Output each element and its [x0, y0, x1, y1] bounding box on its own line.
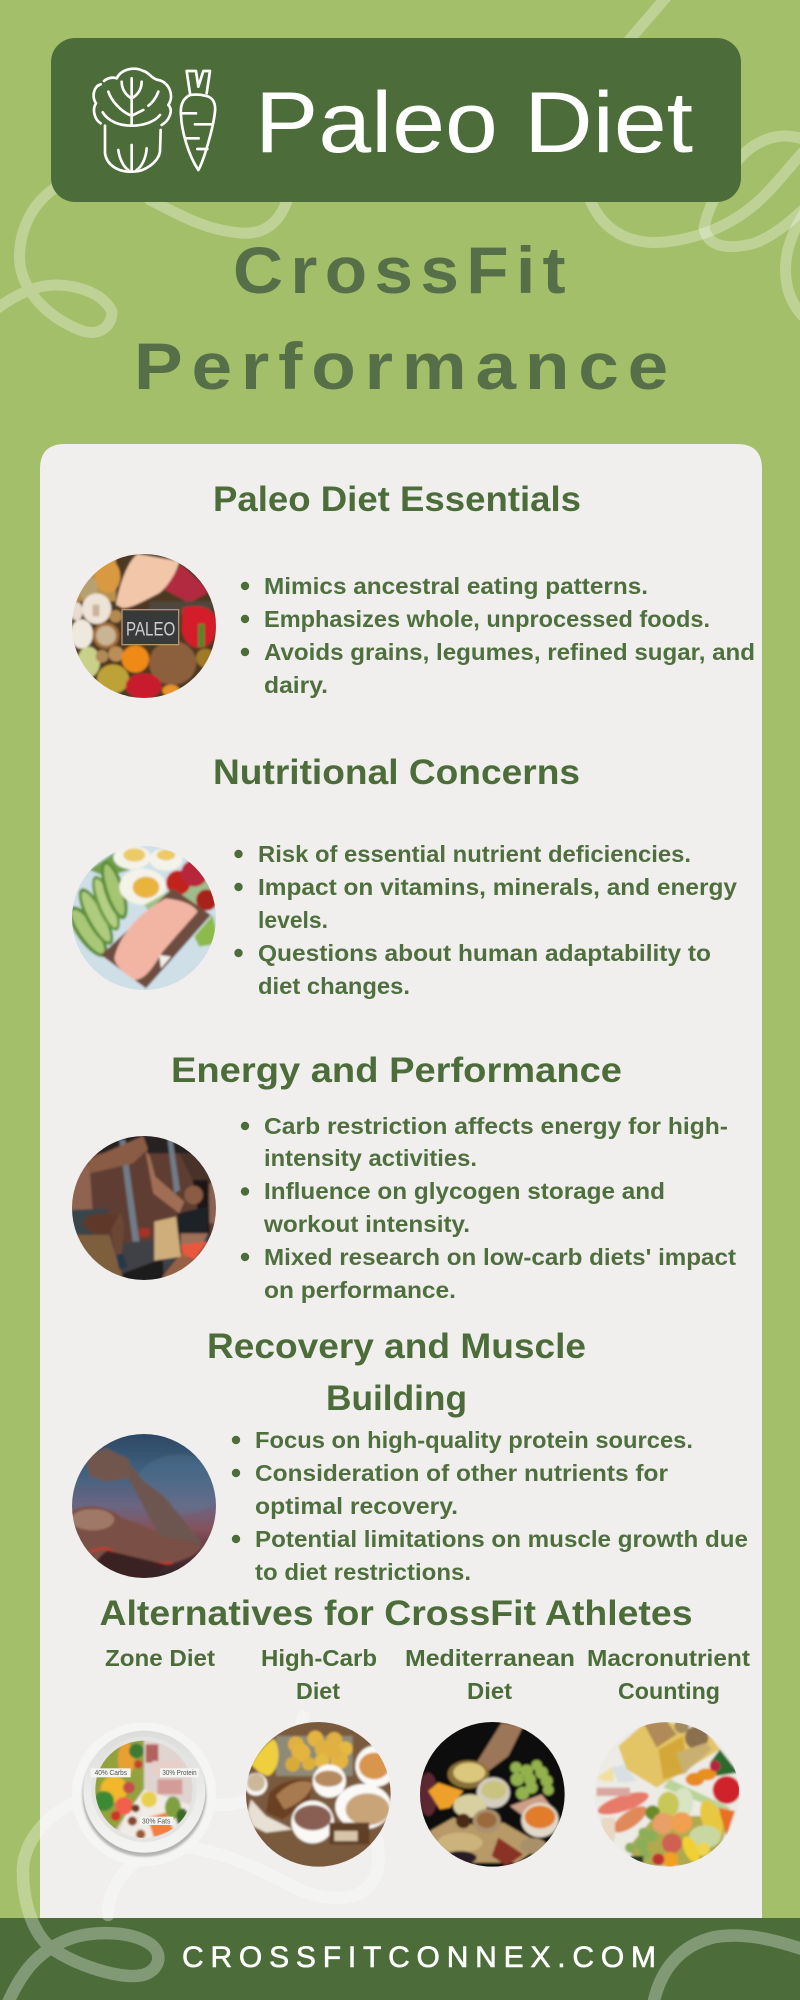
- title: Paleo Diet: Paleo Diet: [255, 75, 693, 171]
- photo: eggs, avocado and salmon: [72, 846, 216, 990]
- bullet list: Carb restriction affects energy for high-: [264, 1113, 728, 1139]
- column: Mediterranean Diet: Diet: [467, 1678, 512, 1704]
- bullet list: [234, 841, 737, 999]
- panel: content card: [40, 444, 762, 1918]
- bullet list: on performance.: [264, 1277, 456, 1303]
- subtitle: CrossFit Performance: CrossFit: [233, 233, 573, 307]
- bullet list: to diet restrictions.: [255, 1559, 471, 1585]
- bullet list: Potential limitations on muscle growth due: [255, 1526, 748, 1552]
- heading: Nutritional Concerns: [213, 753, 580, 792]
- bullet list: Focus on high-quality protein sources.: [255, 1427, 693, 1453]
- column: High-Carb Diet: High-Carb: [261, 1645, 377, 1671]
- photo: paleo foods: [72, 554, 216, 698]
- bullet list: [241, 1113, 736, 1303]
- photo label: PALEO: PALEO: [126, 620, 175, 641]
- column: Mediterranean Diet: Mediterranean: [405, 1645, 575, 1671]
- bullet list: Emphasizes whole, unprocessed foods.: [264, 606, 710, 632]
- bullet list: Consideration of other nutrients for: [255, 1460, 668, 1486]
- bullet list: [232, 1427, 748, 1585]
- column: Zone Diet: [81, 1649, 215, 1858]
- bullet list: dairy.: [264, 672, 328, 698]
- plate labels: [95, 1770, 197, 1825]
- plate labels: 30% Fats: [142, 1818, 171, 1825]
- column: Zone Diet: Zone Diet: [105, 1645, 215, 1671]
- heading: Recovery and Muscle: [207, 1327, 586, 1366]
- section: Energy and Performance: [66, 1051, 736, 1303]
- photo: mediterranean platter: [417, 1719, 570, 1869]
- subtitle: CrossFit Performance: [134, 233, 677, 403]
- bullet list: Mimics ancestral eating patterns.: [264, 573, 648, 599]
- bullet list: diet changes.: [258, 973, 410, 999]
- bullet list: optimal recovery.: [255, 1493, 458, 1519]
- bullet list: [241, 573, 755, 698]
- bullet list: Questions about human adaptability to: [258, 940, 711, 966]
- subtitle: CrossFit Performance: Performance: [134, 329, 677, 403]
- heading: Paleo Diet Essentials: [213, 480, 581, 519]
- plate labels: 40% Carbs: [95, 1770, 127, 1777]
- heading: Building: [326, 1379, 467, 1418]
- plate labels: 30% Protein: [162, 1770, 197, 1777]
- photo: zone diet plate: [81, 1730, 208, 1858]
- bullet list: Mixed research on low-carb diets' impact: [264, 1244, 736, 1270]
- column: High-Carb Diet: Diet: [296, 1678, 340, 1704]
- bullet list: levels.: [258, 907, 328, 933]
- footer bar: [0, 1918, 800, 2000]
- heading: [207, 1327, 586, 1418]
- section: Alternatives for CrossFit Athletes: [72, 1594, 750, 1869]
- photo: athletes high five: [72, 1136, 216, 1280]
- bullet list: workout intensity.: [263, 1211, 470, 1237]
- column: Macronutrient Counting: Macronutrient: [587, 1645, 750, 1671]
- photo: macronutrient food groups: [592, 1719, 742, 1869]
- photo: high-carb foods: [243, 1719, 397, 1869]
- bullet list: Risk of essential nutrient deficiencies.: [258, 841, 691, 867]
- section: Nutritional Concerns: [62, 753, 737, 999]
- icon: lettuce and carrot: [94, 69, 215, 172]
- photo: flexed arm: [72, 1434, 216, 1578]
- column: High-Carb Diet: [243, 1645, 397, 1869]
- header banner: [51, 38, 741, 202]
- heading: Alternatives for CrossFit Athletes: [100, 1594, 692, 1633]
- bullet list: Avoids grains, legumes, refined sugar, and: [264, 639, 755, 665]
- section: Paleo Diet Essentials: [66, 480, 755, 704]
- column: Macronutrient Counting: [587, 1645, 750, 1869]
- column: Mediterranean Diet: [405, 1645, 575, 1869]
- bullet list: Impact on vitamins, minerals, and energy: [258, 874, 737, 900]
- bullet list: Influence on glycogen storage and: [264, 1178, 665, 1204]
- section: Recovery and Muscle Building: [66, 1327, 748, 1585]
- column: Macronutrient Counting: Counting: [618, 1678, 720, 1704]
- heading: Energy and Performance: [171, 1051, 622, 1090]
- bullet list: intensity activities.: [264, 1145, 477, 1171]
- footer website: CROSSFITCONNEX.COM: [182, 1941, 656, 1974]
